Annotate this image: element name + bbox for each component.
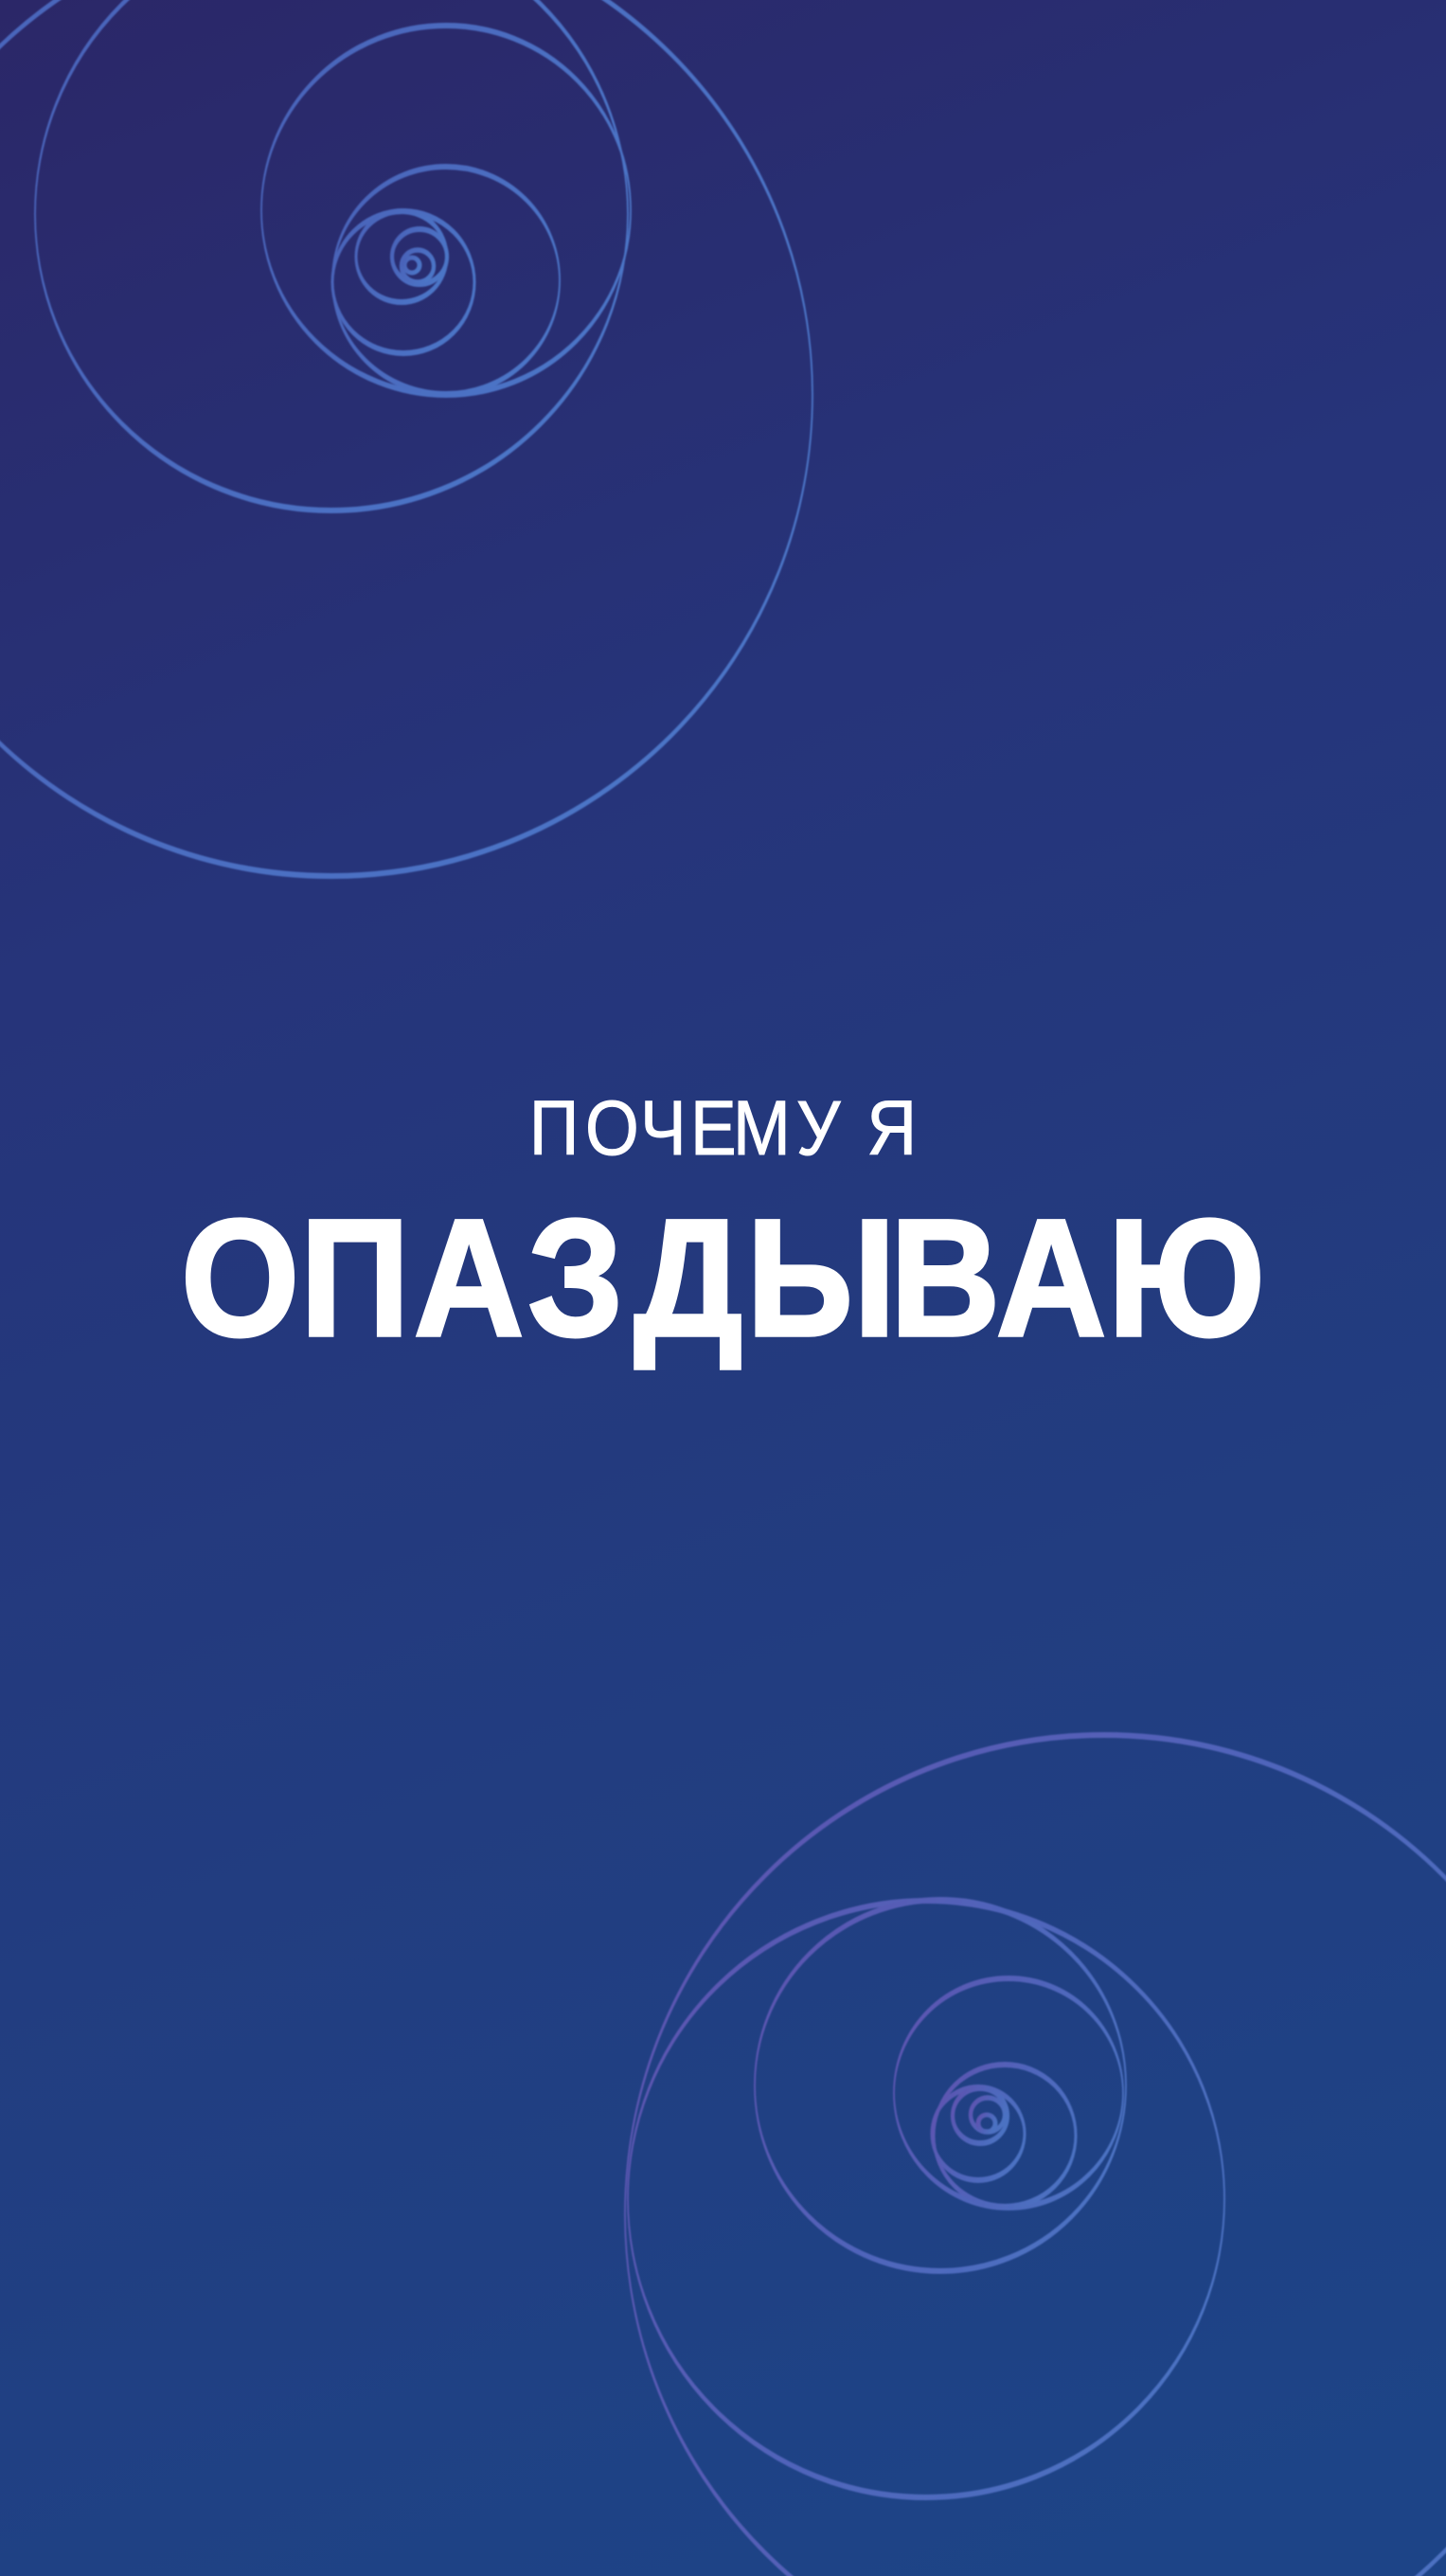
- title: [181, 1085, 1265, 1371]
- spiral: bottom right: [625, 1735, 1446, 2576]
- main heading: ОПАЗДЫВАЮ: [181, 1184, 1265, 1371]
- subtitle line: ПОЧЕМУ Я: [529, 1085, 917, 1172]
- spiral: top left: [0, 0, 812, 876]
